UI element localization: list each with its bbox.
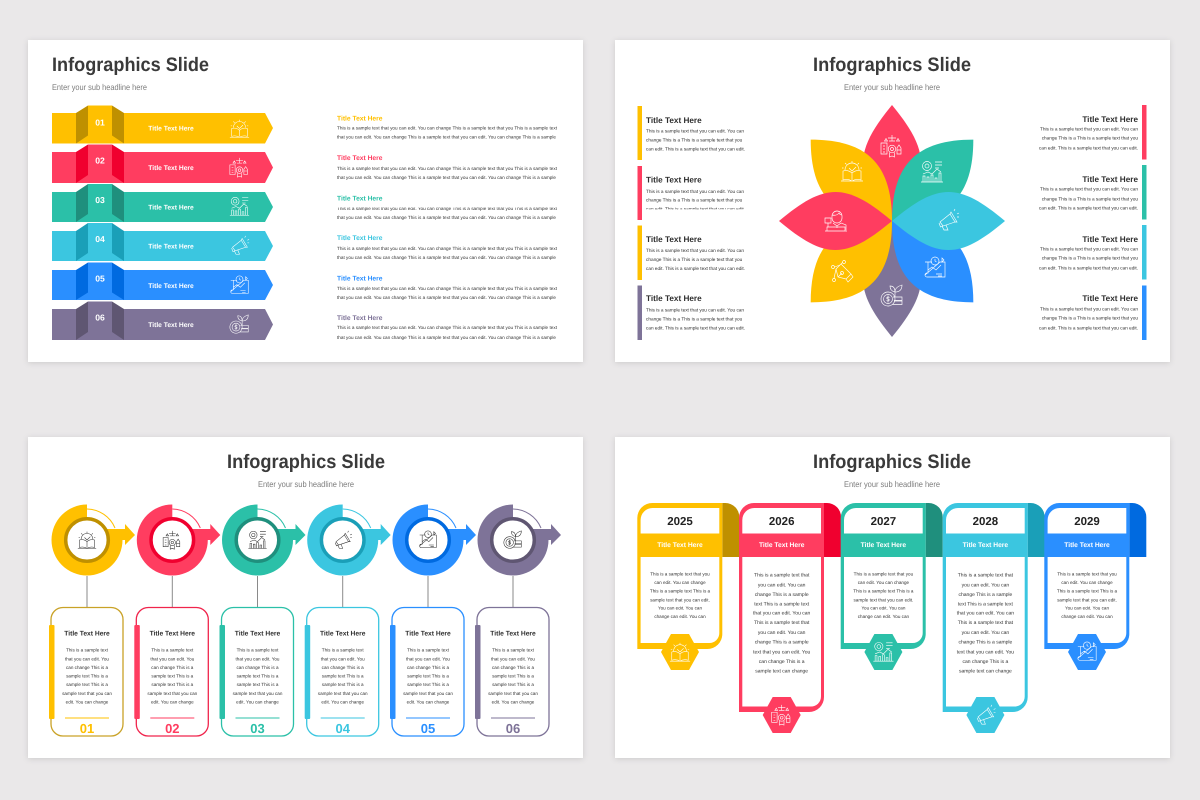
step 04: sample text This is a (322, 682, 364, 687)
year card 2027: can edit. You can change (858, 580, 910, 585)
step 02: sample text that you can (147, 691, 198, 696)
left note 4: Title Text Here (646, 294, 702, 303)
left note 1: change This is a This is a sample text that you (646, 138, 743, 143)
year card 2028: This is a sample text that (958, 620, 1014, 626)
right note 4: change This is a This is a sample text that you (1042, 316, 1138, 321)
step 01: sample text This is a (66, 674, 108, 679)
year card 2026: that you can edit. You can (753, 610, 811, 616)
year card 2028: 2028 (973, 516, 999, 528)
left note 2 (638, 166, 747, 220)
right note 1: This is a sample text that you can edit. You can (1040, 127, 1138, 132)
ribbon 02 (52, 144, 273, 183)
step 05: can change This is a (407, 665, 449, 670)
year card 2028: This is a sample text that (958, 572, 1014, 578)
text block 05: Title Text Here (337, 275, 383, 282)
left note 2: change This is a This is a sample text that you (646, 198, 743, 203)
left note 1: This is a sample text that you can edit. You can (646, 129, 744, 134)
step 05: This is a sample text (407, 648, 450, 653)
step 05: that you can edit. You (406, 656, 450, 661)
text block 01 (337, 116, 558, 140)
year card 2029: 2029 (1074, 516, 1100, 528)
year card 2028: text This is a sample text (958, 602, 1013, 608)
step 04: edit. You can change (321, 700, 364, 705)
year card 2029: This is a sample text that you (1057, 572, 1117, 577)
year card 2026: text This is a sample text (754, 602, 810, 608)
year card 2029: Title Text Here (1064, 542, 1110, 549)
subheading: panel 2: Enter your sub headline here (844, 82, 940, 92)
left note 4 (638, 286, 745, 340)
left note 1: Title Text Here (646, 116, 702, 125)
step 06: edit. You can change (492, 700, 535, 705)
step 06: Title Text Here (490, 630, 536, 638)
year card 2026: This is a sample text that (754, 572, 810, 578)
flower chart (779, 105, 1005, 337)
year card 2028: you can edit. You can (962, 582, 1009, 588)
left note 2: Title Text Here (646, 175, 702, 184)
left note 3: This is a sample text that you can edit. You can (646, 248, 744, 253)
year card 2029: sample text that you can edit. (1057, 598, 1117, 603)
step 04: Title Text Here (320, 630, 366, 638)
text block 02 (337, 155, 558, 180)
year card 2028: change This is a sample (958, 640, 1013, 646)
year card 2028: you can edit. You can (962, 630, 1009, 636)
ribbon 05: Title Text Here (148, 283, 194, 290)
step 03 (220, 504, 306, 736)
step 05: sample text This is a (407, 682, 449, 687)
year card 2029: You can edit. You can (1065, 605, 1109, 610)
subheading: panel 3: Enter your sub headline here (258, 479, 354, 489)
year card 2028: that you can edit. You can (957, 610, 1014, 616)
right note 3: This is a sample text that you can edit. You can (1040, 247, 1138, 252)
step 01: This is a sample text (66, 648, 109, 653)
right note 3: can edit. This is a sample text that you can edit. (1039, 266, 1138, 271)
left note 3: Title Text Here (646, 235, 702, 244)
year card 2025: 2025 (667, 516, 693, 528)
ribbon 03 (52, 184, 273, 222)
text block 01: This is a sample text that you can edit. You can change This is a sample text that you This is a sample text (337, 126, 558, 131)
step 06: sample text This is a (492, 682, 534, 687)
step 05: Title Text Here (405, 630, 451, 638)
text block 06 (337, 315, 558, 340)
ribbon 03: 03 (95, 195, 105, 205)
year card 2025: This is a sample text that you (650, 572, 710, 577)
step 05: sample text This is a (407, 674, 449, 679)
right note 4: Title Text Here (1082, 294, 1138, 303)
right note 1: can edit. This is a sample text that you can edit. (1039, 146, 1138, 151)
year card 2028 (943, 503, 1045, 733)
year card 2025: change can edit. You can (654, 614, 706, 619)
step 01: sample text This is a (66, 682, 108, 687)
year card 2026: sample text can change (755, 669, 808, 675)
year card 2027: 2027 (871, 516, 896, 528)
ribbon 04: 04 (95, 234, 105, 244)
step 03: that you can edit. You (236, 656, 280, 661)
left note 2: can edit. This is a sample text that you can edit. (646, 206, 745, 211)
subheading: panel 4: Enter your sub headline here (844, 479, 940, 489)
step 01: 01 (80, 721, 94, 736)
step 03: edit. You can change (236, 700, 279, 705)
ribbon 02: Title Text Here (148, 165, 194, 172)
text block 04 (337, 235, 558, 260)
step 06: 06 (506, 721, 520, 736)
ribbon 05 (52, 262, 273, 300)
right note 2: can edit. This is a sample text that you can edit. (1039, 206, 1138, 211)
step 04: can change This is a (322, 665, 364, 670)
year card 2025 (637, 503, 739, 670)
step 05: sample text that you can (403, 691, 453, 696)
step 04: sample text This is a (322, 674, 364, 679)
heading: panel 4 title: Infographics Slide (813, 451, 971, 473)
step 03: Title Text Here (235, 630, 281, 638)
ribbon 06: 06 (95, 312, 105, 322)
left note 3: can edit. This is a sample text that you can edit. (646, 266, 745, 271)
year card 2026: you can edit. You can (758, 630, 806, 636)
step 04: sample text that you can (318, 691, 368, 696)
text block 02: This is a sample text that you can edit. You can change This is a sample text that you This is a sample text (337, 166, 558, 171)
text block 03: that you can edit. You can change This is a sample text that you can edit. You can change This is a sample (337, 215, 556, 220)
year card 2029: This is a sample text This is a (1057, 589, 1118, 594)
heading: panel 1 title: Infographics Slide (52, 54, 209, 76)
left note 3: change This is a This is a sample text that you (646, 257, 743, 262)
right note 2: change This is a This is a sample text that you (1042, 197, 1138, 202)
year card 2028: text that you can edit. You (957, 649, 1014, 655)
year card 2025: You can edit. You can (658, 605, 702, 610)
year card 2027 (841, 503, 943, 670)
right note 4 (1039, 286, 1146, 340)
year card 2027: change can edit. You can (858, 614, 910, 619)
step 06: sample text This is a (492, 674, 534, 679)
year card 2026: can change This is a (759, 659, 805, 665)
step 03: sample text This is a (237, 682, 279, 687)
step 06: This is a sample text (492, 648, 535, 653)
ribbon 02: 02 (95, 156, 105, 166)
right note 3: change This is a This is a sample text that you (1042, 256, 1138, 261)
left note 1: can edit. This is a sample text that you can edit. (646, 146, 745, 151)
step 04: that you can edit. You (321, 656, 365, 661)
step 05 (390, 504, 476, 736)
ribbon 01: Title Text Here (148, 126, 194, 132)
year card 2027: This is a sample text This is a (853, 589, 914, 594)
right note 2: This is a sample text that you can edit. You can (1040, 187, 1138, 192)
step 05: 05 (421, 721, 435, 736)
ribbon 04 (52, 223, 273, 261)
year card 2027: This is a sample text that you (854, 572, 914, 577)
step 03: sample text that you can (233, 691, 283, 696)
year card 2029: can edit. You can change (1061, 580, 1113, 585)
text block 03 (336, 195, 560, 220)
right note 1: Title Text Here (1082, 115, 1138, 124)
text block 01: Title Text Here (337, 116, 383, 122)
right note 3: Title Text Here (1082, 235, 1138, 244)
text block 04: This is a sample text that you can edit. You can change This is a sample text that you This is a sample text (337, 246, 558, 251)
year card 2028: change This is a sample (958, 592, 1013, 598)
year card 2025: Title Text Here (657, 542, 703, 549)
step 01 (49, 504, 135, 736)
year card 2029: change can edit. You can (1061, 614, 1113, 619)
text block 06: Title Text Here (337, 315, 383, 322)
year card 2026: 2026 (769, 516, 794, 528)
year card 2025: This is a sample text This is a (650, 589, 711, 594)
step 04: This is a sample text (322, 648, 364, 653)
step 02: sample text This is a (151, 674, 194, 679)
panel: arrow list slide (28, 40, 583, 362)
year card 2027: You can edit. You can (861, 605, 906, 610)
panel: flower slide (615, 40, 1170, 362)
ribbon 05: 05 (95, 274, 105, 284)
step 02: that you can edit. You (150, 656, 195, 661)
year card 2026 (739, 503, 841, 733)
step 01: Title Text Here (64, 630, 110, 638)
text block 04: that you can edit. You can change This is a sample text that you can edit. You can change This is a sample (337, 255, 556, 260)
step 03: 03 (250, 721, 265, 736)
ribbon 01: 01 (95, 118, 105, 128)
year card 2028: Title Text Here (963, 542, 1008, 549)
subheading: panel 1: Enter your sub headline here (52, 82, 147, 92)
year card 2026: Title Text Here (759, 542, 805, 549)
text block 05: that you can edit. You can change This is a sample text that you can edit. You can change This is a sample (337, 295, 556, 300)
step 03: sample text This is a (237, 674, 279, 679)
panel: timeline slide (615, 437, 1170, 758)
step 02: sample text This is a (151, 682, 194, 687)
right note 4: This is a sample text that you can edit. You can (1040, 307, 1138, 312)
left note 3 (638, 226, 745, 280)
ribbon 03: Title Text Here (148, 204, 194, 212)
left note 1 (638, 106, 745, 160)
right note 4: can edit. This is a sample text that you can edit. (1039, 326, 1138, 331)
panel: circular process slide (28, 437, 583, 758)
text block 03: Title Text Here (337, 195, 383, 202)
step 02 (134, 504, 220, 736)
step 03: This is a sample text (237, 648, 279, 653)
text block 05 (337, 275, 558, 300)
year card 2026: change This is a sample (755, 592, 809, 598)
text block 01: that you can edit. You can change This is a sample text that you can edit. You can change This is a sample (337, 135, 556, 140)
year card 2026: text that you can edit. You (753, 649, 811, 655)
left note 4: can edit. This is a sample text that you can edit. (646, 326, 745, 331)
year card 2026: change This is a sample (755, 640, 809, 646)
left note 2: This is a sample text that you can edit. You can (646, 189, 744, 194)
step 02: can change This is a (151, 665, 194, 670)
text block 02: Title Text Here (337, 155, 383, 162)
year card 2026: you can edit. You can (758, 582, 806, 588)
text block 06: This is a sample text that you can edit. You can change This is a sample text that you This is a sample text (337, 325, 558, 330)
step 02: Title Text Here (150, 630, 195, 638)
text block 02: that you can edit. You can change This is a sample text that you can edit. You can change This is a sample (337, 175, 556, 180)
text block 05: This is a sample text that you can edit. You can change This is a sample text that you This is a sample text (337, 286, 558, 291)
step 03: can change This is a (236, 665, 279, 670)
step 01: can change This is a (66, 665, 108, 670)
step 06: sample text that you can (488, 691, 538, 696)
step 01: that you can edit. You (65, 656, 109, 661)
text block 06: that you can edit. You can change This is a sample text that you can edit. You can change This is a sample (337, 335, 556, 340)
ribbon 04: Title Text Here (148, 244, 194, 250)
right note 1: change This is a This is a sample text that you (1042, 136, 1138, 141)
year card 2028: can change This is a (963, 659, 1008, 665)
step 02: 02 (165, 721, 180, 736)
ribbon 06: Title Text Here (148, 322, 194, 329)
year card 2026: This is a sample text that (754, 620, 810, 626)
ribbon 01 (52, 106, 273, 144)
year card 2027: sample text that you can edit. (854, 598, 913, 603)
text block 04: Title Text Here (337, 235, 383, 242)
step 06: that you can edit. You (491, 656, 535, 661)
year card 2025: sample text that you can edit. (650, 598, 710, 603)
year card 2028: sample text can change (959, 669, 1012, 675)
text block 03: This is a sample text that you can edit. You can change This is a sample text that you This is a sample text (337, 206, 558, 211)
step 01: sample text that you can (62, 691, 112, 696)
right note 2 (1039, 165, 1146, 220)
left note 4: This is a sample text that you can edit. You can (646, 308, 744, 313)
step 04 (305, 504, 391, 736)
heading: panel 3 title: Infographics Slide (227, 451, 385, 473)
year card 2029 (1044, 503, 1146, 670)
step 06: can change This is a (492, 665, 534, 670)
step 05: edit. You can change (407, 700, 450, 705)
step 02: This is a sample text (151, 648, 194, 653)
heading: panel 2 title: Infographics Slide (813, 54, 971, 76)
step 06 (475, 504, 561, 736)
step 01: edit. You can change (66, 700, 109, 705)
step 02: edit. You can change (151, 700, 194, 705)
right note 3 (1039, 225, 1146, 280)
ribbon 06 (52, 302, 273, 340)
year card 2027: Title Text Here (861, 542, 906, 549)
year card 2025: can edit. You can change (654, 580, 706, 585)
right note 2: Title Text Here (1082, 175, 1138, 184)
step 04: 04 (335, 721, 351, 736)
left note 4: change This is a This is a sample text that you (646, 317, 743, 322)
right note 1 (1039, 105, 1146, 160)
